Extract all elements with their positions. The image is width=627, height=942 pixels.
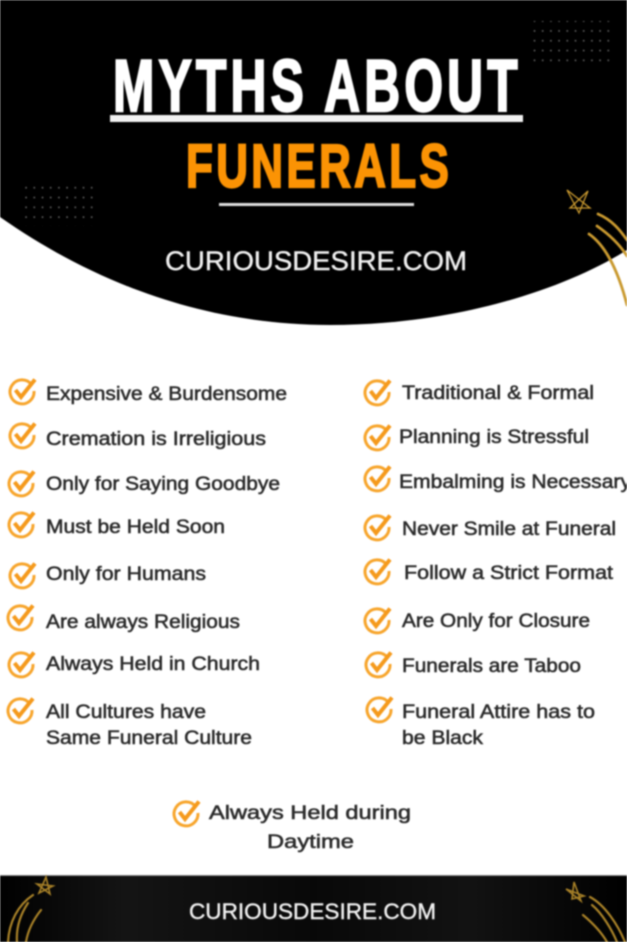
myth item bbox=[365, 466, 627, 493]
left column of myths bbox=[8, 380, 287, 749]
myth item: be Black bbox=[402, 727, 483, 749]
myth item: Never Smile at Funeral bbox=[402, 518, 616, 540]
title: myths about: MYTHS ABOUT bbox=[113, 46, 518, 127]
myth item: Only for Saying Goodbye bbox=[46, 473, 280, 495]
myth item: Planning is Stressful bbox=[399, 426, 589, 448]
myth item bbox=[8, 698, 252, 749]
myth item: Expensive & Burdensome bbox=[46, 383, 287, 405]
centered myth item: Daytime bbox=[267, 831, 354, 853]
myth item bbox=[366, 652, 581, 677]
website url top: CURIOUSDESIRE.COM bbox=[165, 246, 467, 276]
myth item: Are Only for Closure bbox=[402, 610, 590, 632]
website url footer: CURIOUSDESIRE.COM bbox=[189, 899, 436, 924]
icon: shooting star top right bbox=[567, 190, 627, 305]
myth item bbox=[10, 563, 206, 588]
myth item bbox=[10, 424, 266, 450]
myth item: All Cultures have bbox=[46, 701, 206, 723]
header black curved background bbox=[0, 0, 627, 325]
myth item bbox=[365, 560, 614, 584]
short divider line bbox=[219, 203, 414, 206]
title: funerals: FUNERALS bbox=[186, 133, 449, 201]
title underline bbox=[110, 115, 523, 122]
right column of myths bbox=[365, 380, 627, 749]
myth item bbox=[9, 512, 225, 538]
myth item: Always Held in Church bbox=[46, 653, 260, 675]
myth item bbox=[10, 380, 287, 405]
dot pattern: top right bbox=[532, 21, 614, 67]
centered myth item: Always Held during bbox=[209, 802, 411, 824]
myth item bbox=[367, 698, 595, 749]
icon: shooting star footer left bbox=[8, 877, 53, 942]
myth item: Are always Religious bbox=[46, 611, 240, 633]
myth item: Traditional & Formal bbox=[402, 382, 594, 404]
myth item bbox=[8, 606, 240, 633]
centered myth item bbox=[174, 802, 411, 853]
myth item: Same Funeral Culture bbox=[46, 727, 252, 749]
myth item: Embalming is Necessary bbox=[399, 471, 627, 493]
dot pattern: left bbox=[22, 182, 98, 226]
myth item: Funerals are Taboo bbox=[402, 655, 581, 677]
myth item: Only for Humans bbox=[46, 563, 206, 585]
myth item: Funeral Attire has to bbox=[402, 701, 595, 723]
myth item bbox=[365, 380, 594, 405]
myth item: Follow a Strict Format bbox=[404, 562, 614, 584]
icon: shooting star footer right bbox=[566, 882, 625, 942]
myth item: Must be Held Soon bbox=[46, 516, 225, 538]
myth item: Cremation is Irreligious bbox=[46, 428, 266, 450]
footer band bbox=[0, 875, 627, 942]
